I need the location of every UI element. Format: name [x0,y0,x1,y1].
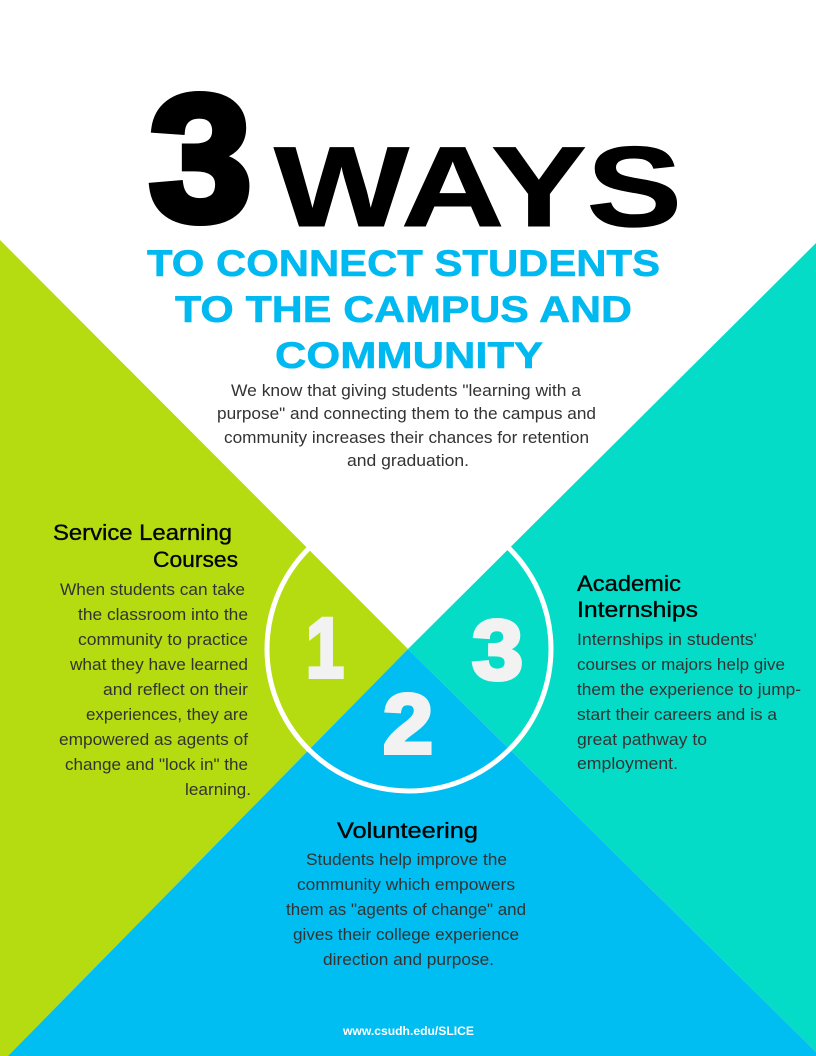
subtitle: TO THE CAMPUS AND [175,289,632,330]
text: service learning description: and reflect on their [103,681,249,699]
panel: service learning courses [53,520,251,799]
big number 3: 3 [149,58,252,258]
heading: service learning courses: Service Learning [53,520,232,545]
number 2: 2 [383,677,433,771]
panel: academic internships [577,571,801,773]
text: volunteering description: community which empowers [297,876,515,894]
subtitle [147,243,660,376]
text: service learning description: community to practice [78,631,248,649]
intro paragraph: and graduation. [347,452,469,470]
intro paragraph [217,382,596,470]
subtitle: TO CONNECT STUDENTS [147,243,660,284]
circle ring [267,507,551,791]
text: service learning description: change and "lock in" the [65,756,248,774]
heading: volunteering: Volunteering [337,818,478,843]
teal triangle [408,243,816,1052]
intro paragraph: purpose" and connecting them to the campus and [217,405,596,423]
heading: academic internships [577,571,698,622]
heading: service learning courses: Courses [153,547,238,572]
text: service learning description: empowered as agents of [59,731,248,749]
number 1: 1 [306,601,344,695]
intro paragraph: We know that giving students "learning with a [231,382,582,400]
text: volunteering description: direction and purpose. [323,951,494,969]
panel: volunteering [286,818,526,969]
text: service learning description [59,581,251,799]
text: academic internships description: courses or majors help give [577,656,785,674]
text: service learning description: experiences, they are [86,706,248,724]
text: service learning description: When students can take [60,581,245,599]
text: academic internships description: great pathway to [577,731,707,749]
heading: academic internships: Internships [577,597,698,622]
intro paragraph: community increases their chances for retention [224,429,589,447]
green triangle [0,240,408,1056]
text: service learning description: the classroom into the [78,606,248,624]
text: volunteering description: Students help improve the [306,851,507,869]
text: academic internships description [577,631,801,773]
number 3: 3 [472,603,523,697]
text: academic internships description: them the experience to jump- [577,681,801,699]
text: academic internships description: employment. [577,755,678,773]
text: service learning description: learning. [185,781,251,799]
heading: service learning courses [53,520,238,572]
text: volunteering description [286,851,526,969]
subtitle: COMMUNITY [275,335,543,376]
blue triangle [8,649,816,1056]
background shapes [0,240,816,1056]
text: academic internships description: Internships in students' [577,631,757,649]
text: volunteering description: gives their college experience [293,926,519,944]
title [149,58,682,258]
text: academic internships description: start their careers and is a [577,706,778,724]
text: service learning description: what they have learned [69,656,248,674]
word WAYS: WAYS [274,124,682,251]
text: volunteering description: them as "agents of change" and [286,901,526,919]
heading: academic internships: Academic [577,571,681,596]
website url: www.csudh.edu/SLICE [342,1024,474,1038]
